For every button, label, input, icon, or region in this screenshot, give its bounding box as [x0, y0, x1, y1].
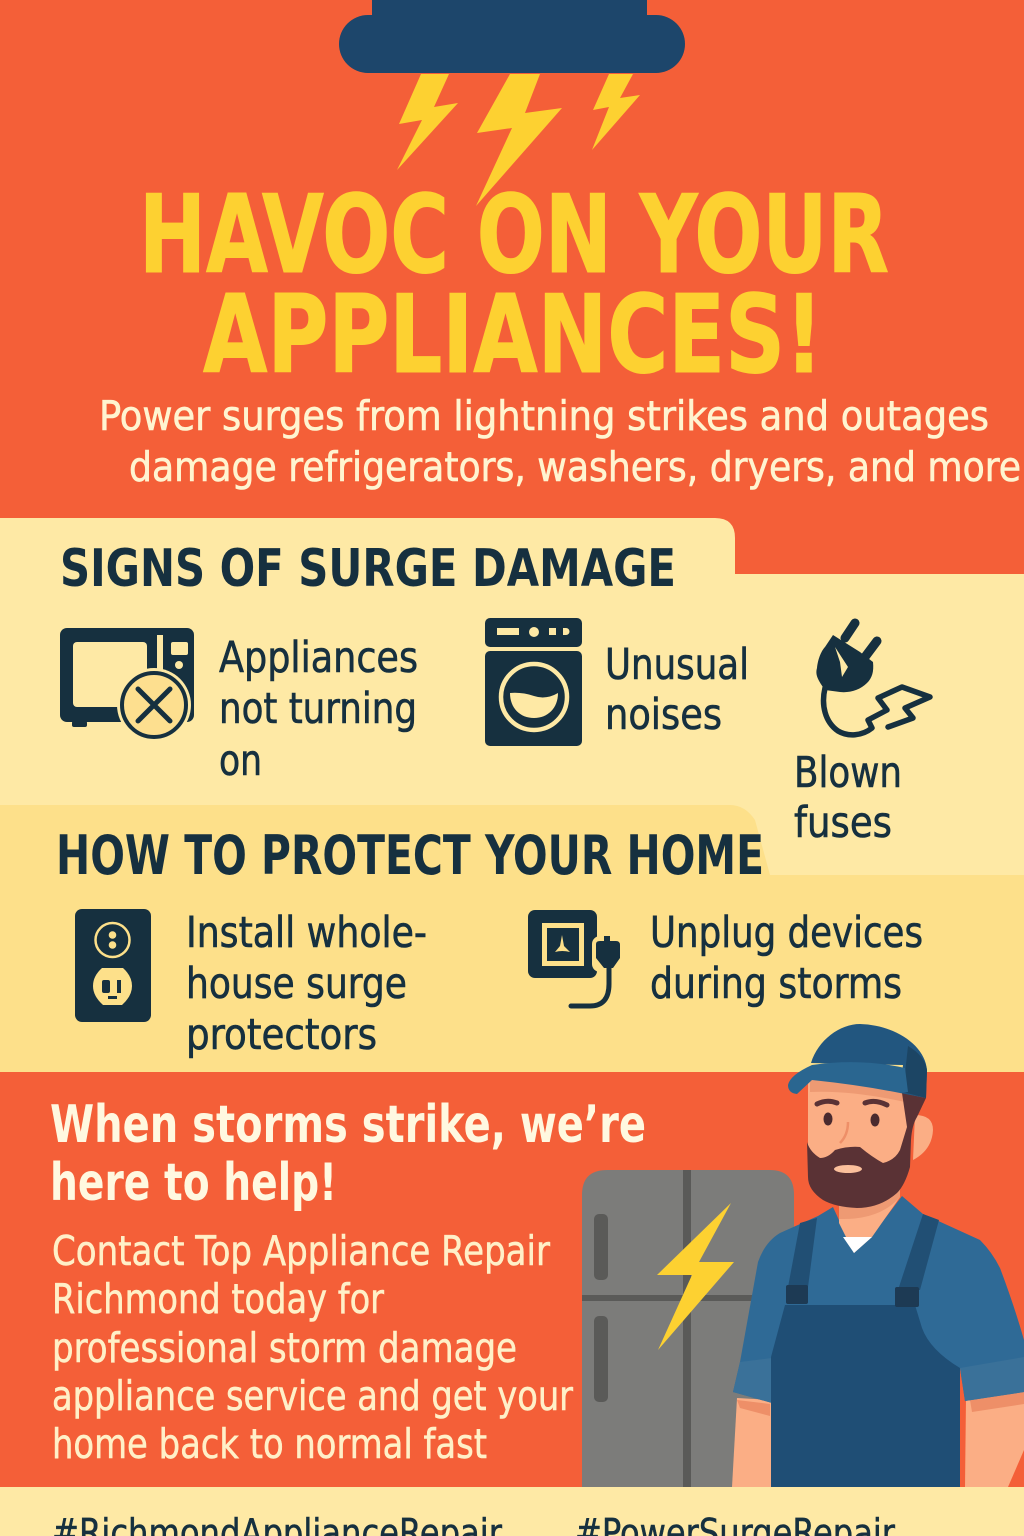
text: install surge protectors: house surge [186, 959, 407, 1009]
text: appliances not turning on: not turning [219, 684, 417, 734]
icon: unplug device [528, 910, 624, 1006]
subtitle [99, 392, 1021, 491]
text: unplug devices: Unplug devices [650, 908, 923, 958]
text: blown fuses [794, 748, 902, 848]
panel: call to action [0, 1024, 1024, 1487]
icon: storm cloud [339, 0, 685, 73]
text: unplug devices: during storms [650, 959, 902, 1009]
subtitle: damage refrigerators, washers, dryers, and more [129, 443, 1021, 491]
icon: microwave [60, 628, 194, 742]
panel: how to protect your home [0, 805, 1024, 1072]
beard [807, 1093, 926, 1208]
text: unusual noises: noises [605, 690, 722, 740]
icon: surge protector outlet [75, 909, 151, 1022]
icon: washing machine [485, 618, 582, 746]
apron [771, 1305, 960, 1487]
shirt [733, 1196, 1024, 1403]
heading: when storms strike [50, 1095, 646, 1213]
text: install surge protectors: protectors [186, 1010, 377, 1060]
footer band [0, 1487, 1024, 1536]
heading: when storms strike: When storms strike, we’re [50, 1095, 646, 1155]
text: appliances not turning on: on [219, 736, 262, 786]
title [139, 173, 889, 398]
text: contact: home back to normal fast [52, 1420, 487, 1468]
heading: signs: SIGNS OF SURGE DAMAGE [60, 539, 676, 599]
text: unplug devices [650, 908, 923, 1009]
hashtags [52, 1511, 896, 1536]
icon: refrigerator [582, 1170, 794, 1487]
text: install surge protectors: Install whole- [186, 908, 427, 958]
text: blown fuses: fuses [794, 798, 892, 848]
icon: blown fuse plug [816, 623, 930, 735]
ear [913, 1115, 933, 1160]
cap [811, 1024, 927, 1098]
title: HAVOC ON YOUR [139, 173, 889, 298]
subtitle: Power surges from lightning strikes and outages [99, 392, 989, 440]
text: unusual noises [605, 640, 749, 740]
text: blown fuses: Blown [794, 748, 902, 798]
title: APPLIANCES! [203, 273, 823, 398]
heading: when storms strike: here to help! [50, 1153, 337, 1213]
text: appliances not turning on [219, 633, 418, 786]
text: install surge protectors [186, 908, 427, 1060]
text: appliances not turning on: Appliances [219, 633, 418, 683]
text: contact: professional storm damage [52, 1324, 517, 1372]
text: contact: Richmond today for [52, 1275, 385, 1323]
text: contact: Contact Top Appliance Repair [52, 1227, 551, 1275]
face [808, 1078, 907, 1170]
text: contact [52, 1227, 574, 1468]
text: contact: appliance service and get your [52, 1372, 574, 1420]
heading: protect: HOW TO PROTECT YOUR HOME [56, 824, 764, 887]
icon: fridge lightning [657, 1203, 734, 1350]
arms [732, 1398, 772, 1487]
icon: lightning bolts [397, 74, 640, 206]
illustration: technician [732, 1024, 1024, 1487]
panel: signs of surge damage [0, 518, 1024, 880]
neck [839, 1180, 900, 1253]
text: unusual noises: Unusual [605, 640, 749, 690]
